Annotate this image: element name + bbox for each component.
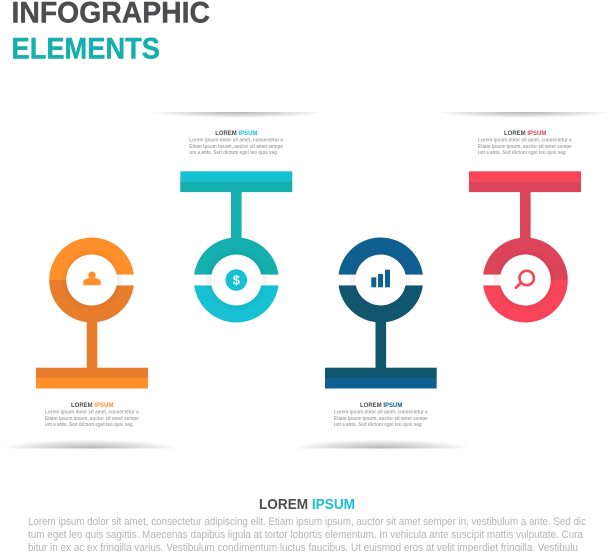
caption: Etiam ipsum ipsum, auctor sit amet sempe [45, 416, 139, 422]
panel: teal step [158, 112, 318, 322]
icon: person [83, 272, 101, 285]
caption: Etiam ipsum ipsum, auctor sit amet sempe [478, 144, 572, 150]
icon: dollar: $ [233, 274, 240, 288]
caption: LOREM IPSUM [215, 130, 258, 137]
panel: red step [444, 112, 604, 322]
footer text block [28, 496, 586, 552]
icon: magnifier [516, 271, 534, 288]
horizontal bar [469, 171, 581, 192]
base shadow [10, 440, 170, 448]
panel: blue step [301, 238, 462, 448]
caption: Etiam ipsum ipsum, auctor sit amet sempe [334, 416, 428, 422]
icon: dollar [226, 269, 247, 291]
stem [376, 320, 386, 368]
caption: Lorem ipsum dolor sit amet, consectetur a [45, 410, 139, 416]
caption: LOREM IPSUM [504, 130, 547, 137]
gap fill [338, 275, 423, 285]
panel: orange step [10, 238, 170, 448]
gap fill [483, 275, 500, 285]
stem [231, 192, 242, 240]
stem [87, 320, 97, 368]
top shadow [444, 112, 604, 118]
title [12, 0, 210, 66]
title: ELEMENTS [12, 32, 160, 66]
ring [483, 237, 568, 323]
icon: bar chart [371, 270, 390, 287]
caption [189, 130, 283, 156]
caption: Lorem ipsum dolor sit amet, consectetur a [189, 138, 283, 144]
stem [520, 192, 531, 240]
caption [45, 402, 139, 428]
ring [49, 237, 134, 323]
gap fill [117, 275, 134, 285]
caption: Etiam ipsum ipsum, auctor sit amet sempe [189, 144, 283, 150]
caption [478, 130, 572, 156]
caption: Lorem ipsum dolor sit amet, consectetur a [334, 410, 428, 416]
gap fill [194, 275, 279, 285]
caption: LOREM IPSUM [360, 402, 403, 409]
top shadow [158, 112, 318, 118]
caption [334, 402, 428, 428]
ring [338, 237, 423, 323]
ring [194, 237, 279, 323]
footer heading: LOREM IPSUM [259, 496, 355, 513]
caption: um a ante. Sed dictum eget leo quis sag [334, 422, 422, 428]
footer paragraph [28, 516, 586, 552]
horizontal bar [180, 171, 292, 192]
caption: Lorem ipsum dolor sit amet, consectetur a [478, 138, 572, 144]
caption: um a ante. Sed dictum eget leo quis sag [478, 150, 566, 156]
base shadow [301, 440, 462, 448]
caption: um a ante. Sed dictum eget leo quis sag [189, 150, 277, 156]
caption: LOREM IPSUM [71, 402, 114, 409]
horizontal bar [36, 368, 148, 388]
caption: um a ante. Sed dictum eget leo quis sag [45, 422, 133, 428]
horizontal bar [325, 368, 437, 388]
